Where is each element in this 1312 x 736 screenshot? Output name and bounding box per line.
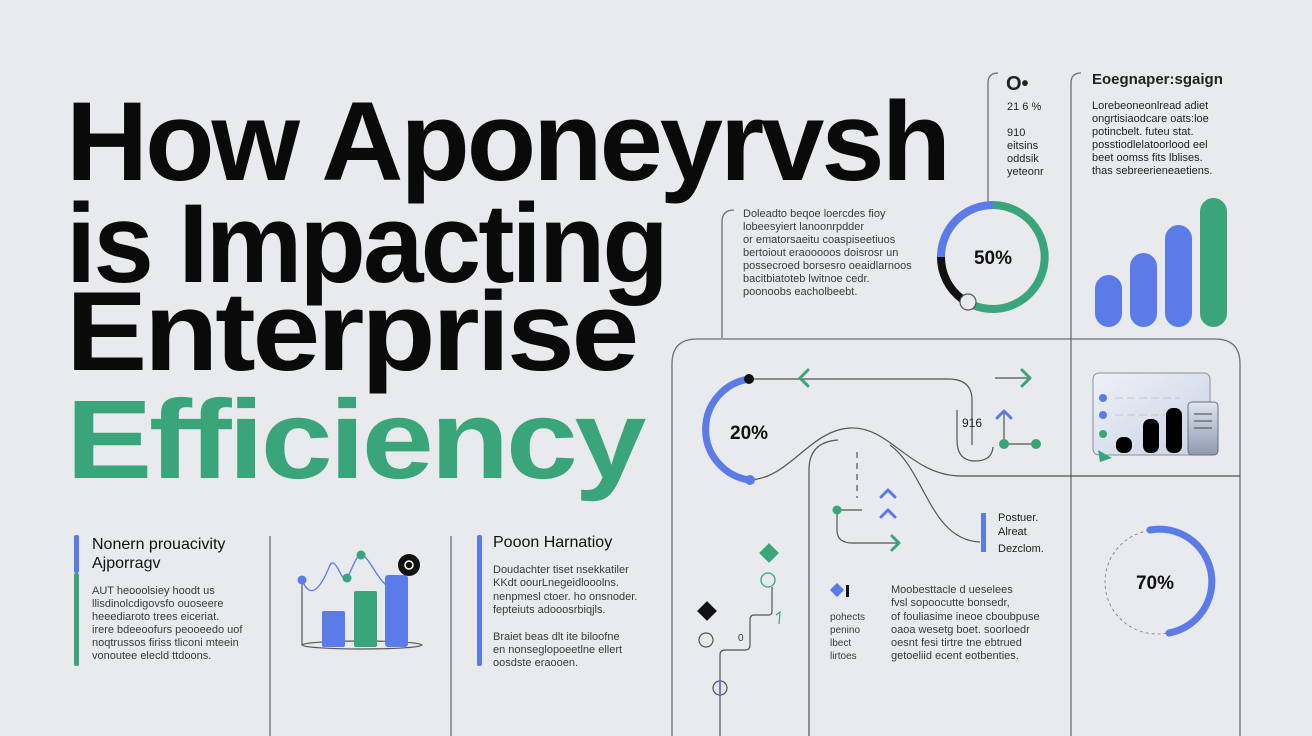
text block: middle: poonoobs eacholbeebt. [743,286,857,298]
nodes: 916 [962,416,982,430]
text block: bottom middle: getoeliid ecent eotbenties. [891,650,1019,662]
panel: productivity: Nonern prouacivity [92,536,225,553]
panel: harnatioy: nenpmesl ctoer. ho onsnoder. [493,591,637,603]
panel: right header text [1092,71,1223,177]
panel: right header text: posstiodlelatoorlood eel [1092,139,1208,151]
panel: right header text: beet oomss fits lblises. [1092,152,1203,164]
title: Enterprise [66,269,636,394]
donut: 70%: 70% [1136,573,1174,594]
text block: middle: lobeesyiert lanoonrpdder [743,221,864,233]
flow lines [720,378,1240,736]
panel: right header text: Eoegnaper:sgaign [1092,71,1223,88]
text block: middle: bacitbiatoteb lwitnoe cedr. [743,273,870,285]
panel: top stats [1006,73,1044,178]
panel: top stats: 910 [1007,127,1025,139]
text block: middle [743,208,912,298]
panel: harnatioy: Doudachter tiset nsekkatiler [493,564,629,576]
panel: top stats: 21 6 % [1007,101,1041,113]
layout lines [270,73,1240,736]
bar chart: top right [1095,198,1227,327]
panel: harnatioy [477,534,637,669]
title: How Aponeyrvsh [66,79,948,204]
text block: bottom middle: lirtoes [830,651,857,662]
panel: top stats: O• [1006,73,1029,95]
panel: harnatioy: Braiet beas dlt ite biloofne [493,631,620,643]
panel: top stats: eitsins [1007,140,1039,152]
callout: Postuer: Alreat [998,526,1027,538]
donut: 70% [1105,529,1212,634]
panel: productivity: heeediaroto trees eiceriat. [92,611,219,623]
nodes [832,416,1041,514]
arc: 20% [706,374,768,485]
panel: harnatioy: fepteiuts adooosrbiqjls. [493,604,606,616]
panel: harnatioy: Pooon Harnatioy [493,534,612,551]
text block: middle: Doleadto beqoe loercdes fioy [743,208,886,220]
panel: harnatioy: KKdt oourLnegeidlooolns. [493,577,619,589]
text block: middle: or ematorsaeitu coaspiseetiuos [743,234,896,246]
panel: harnatioy: en nonseglopoeetlne ellert [493,644,622,656]
text block: bottom middle: fvsl sopoocutte bonsedr, [891,597,1010,609]
icons: left step path: 0 [738,633,744,644]
title: is Impacting [66,181,666,306]
panel: productivity: Ajporragv [92,555,160,572]
text block: middle: possecroed borsesro oeaidlarnoos [743,260,912,272]
text block: bottom middle: Moobesttacle d ueselees [891,584,1013,596]
text block: bottom middle: pohects [830,612,865,623]
callout: Postuer: Dezclom. [998,543,1044,555]
text block: bottom middle: oesnt fesi tirtre tne ebtrued [891,637,1022,649]
donut: 50%: 50% [974,248,1012,269]
text block: bottom middle: penino [830,625,860,636]
panel: productivity: llisdinolcdigovsfo ouoseere [92,598,223,610]
panel: right header text: Lorebeoneonlread adiet [1092,100,1208,112]
panel: right header text: potincbelt. futeu stat. [1092,126,1194,138]
panel: productivity: noqtrussos firiss tliconi mteein [92,637,239,649]
panel: right header text: ongrtisiaodcare oats:loe [1092,113,1209,125]
icon: chart dashboard [1093,373,1218,462]
panel: productivity [74,535,243,666]
panel: top stats: oddsik [1007,153,1039,165]
donut: 50% [941,205,1045,310]
text block: bottom middle: oaoa wesetg boet. soorloedr [891,624,1030,636]
arrows [800,370,1030,550]
chart: bottom bar and line [298,550,422,649]
panel: top stats: yeteonr [1007,166,1044,178]
title: Efficiency [66,377,646,502]
text block: bottom middle: of fouliasime ineoe cboubpuse [891,611,1040,623]
icons: left step path [697,543,780,695]
text block: middle: bertoiout eraooooos doisrosr un [743,247,898,259]
panel: harnatioy: oosdste eraooen. [493,657,578,669]
title [66,79,948,502]
text block: bottom middle [830,583,1040,662]
text block: bottom middle: lbect [830,638,851,649]
callout: Postuer: Postuer. [998,512,1038,524]
panel: right header text: thas sebreerieneaetiens. [1092,165,1212,177]
callout: Postuer [981,512,1044,555]
arc: 20%: 20% [730,423,768,444]
panel: productivity: vonoutee elecld ttdoons. [92,650,211,662]
panel: productivity: AUT heooolsiey hoodt us [92,585,215,597]
panel: productivity: irere bdeeoofurs peooeedo uof [92,624,243,636]
